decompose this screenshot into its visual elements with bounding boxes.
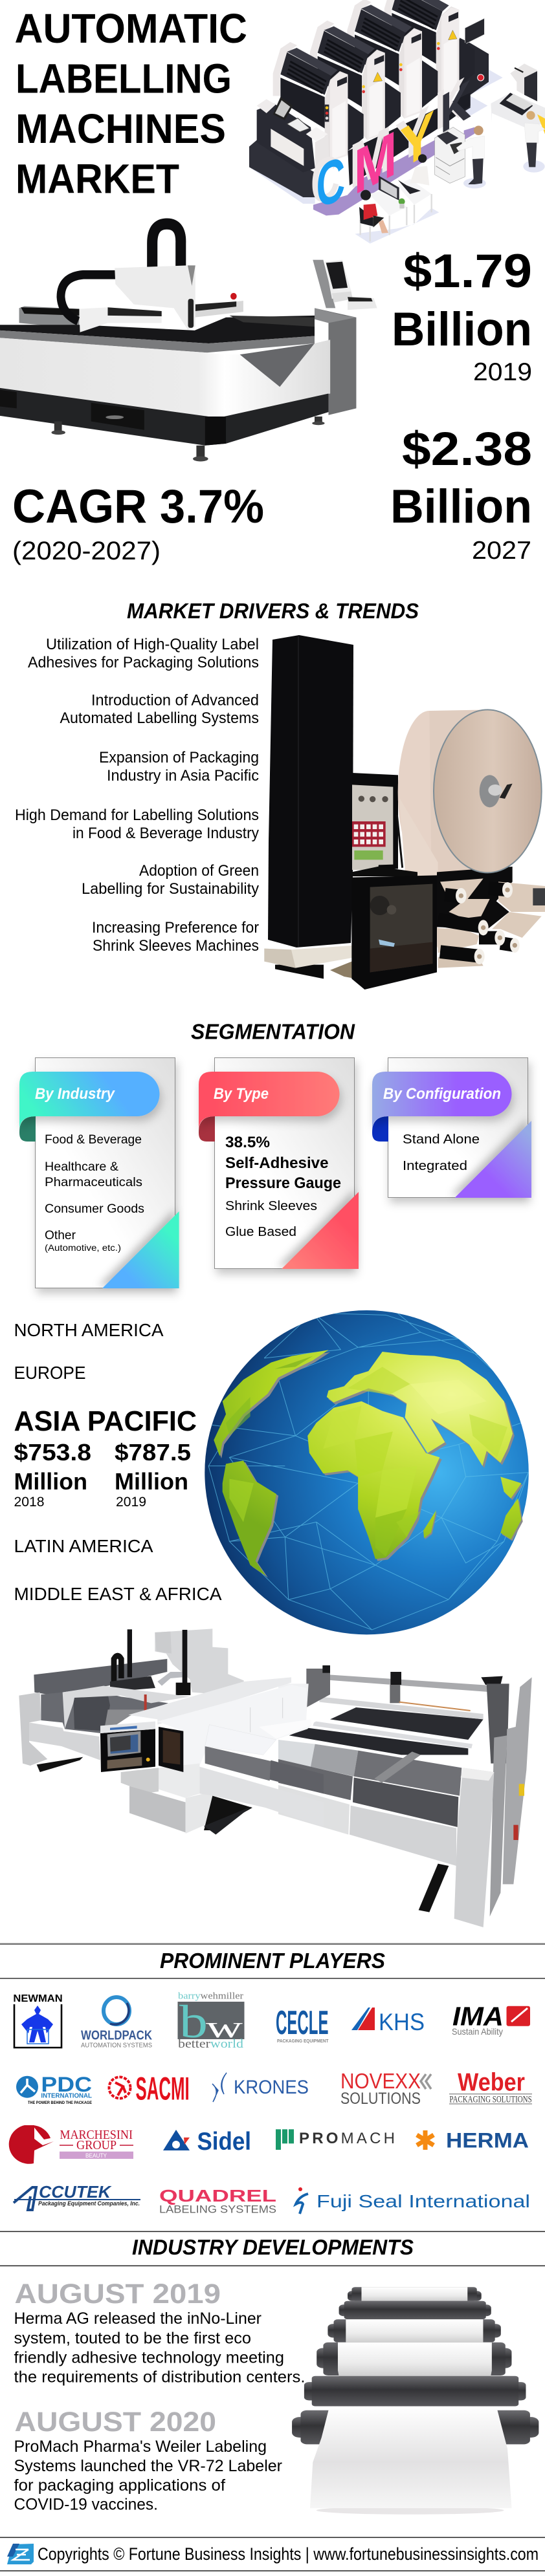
logo: PDC International: THE POWER BEHIND THE PACKAGE: [28, 2101, 93, 2105]
logo: Krones: [212, 2073, 309, 2102]
value: 2027 market size: 2027: [472, 537, 531, 565]
driver: automated systems: Automated Labelling Systems: [60, 709, 259, 727]
illustration: isometric CMYK printing press: C: [311, 140, 340, 219]
logo: ProMach: PROMACH: [299, 2130, 395, 2147]
development: August 2019: [14, 2278, 306, 2386]
value: 2019 market size: Billion: [392, 303, 532, 356]
panel: by configuration: Stand Alone: [403, 1132, 480, 1147]
illustration: isometric CMYK printing press: [249, 0, 545, 244]
title: AUTOMATIC: [14, 5, 247, 52]
panel: drivers list: [15, 636, 259, 955]
panel: by configuration: [372, 1058, 531, 1198]
logo: Sidel: [163, 2128, 251, 2156]
logo: KHS: [351, 2008, 425, 2035]
logo: Krones: KRONES: [234, 2077, 309, 2098]
heading: industry developments: [0, 2231, 545, 2266]
logo: Cecle: [276, 2004, 329, 2044]
illustration: isometric CMYK printing press: Y: [399, 97, 434, 184]
driver: label adhesives: Adhesives for Packaging Solutions: [28, 654, 259, 671]
logo: Newman: NEWMAN: [13, 1993, 63, 2004]
ribbon: by type: By Type: [214, 1085, 269, 1103]
logo: IMA: Sustain Ability: [452, 2026, 503, 2037]
driver: food and beverage demand: High Demand for Labelling Solutions: [15, 806, 259, 824]
value: 2019 market size: $1.79: [403, 245, 532, 298]
CAGR callout: [12, 481, 264, 565]
panel: by type: Self-Adhesive: [225, 1154, 329, 1172]
CAGR callout: (2020-2027): [12, 537, 161, 565]
value: 2019 market size: 2019: [473, 358, 532, 386]
driver: green labelling: [82, 862, 259, 898]
asia pacific values: $753.8: [14, 1439, 91, 1466]
logo: Novexx Solutions: SOLUTIONS: [340, 2090, 421, 2108]
panel: by configuration: Integrated: [403, 1159, 467, 1173]
logo: Worldpack: WORLDPACK: [81, 2028, 152, 2042]
driver: green labelling: Labelling for Sustainability: [82, 880, 259, 898]
value: 2027 market size: [390, 423, 532, 565]
illustration: globe: [205, 1306, 529, 1634]
panel: by industry: Consumer Goods: [45, 1202, 144, 1216]
asia pacific values: ASIA PACIFIC: [14, 1405, 197, 1437]
asia pacific values: 2018: [14, 1495, 44, 1510]
panel: by type: Glue Based: [225, 1225, 296, 1239]
illustration: paper rollers: [292, 2287, 539, 2515]
asia pacific values: [14, 1405, 197, 1510]
panel: by type: [199, 1058, 359, 1269]
development: August 2020: COVID-19 vaccines.: [14, 2495, 158, 2513]
logo: PDC International: INTERNATIONAL: [41, 2092, 93, 2099]
illustration: isometric CMYK printing press: K: [435, 65, 466, 143]
asia pacific values: Million: [115, 1468, 188, 1495]
panel: by type: Pressure Gauge: [225, 1174, 341, 1192]
logo: Accutek: CCUTEK: [39, 2182, 112, 2202]
logo: Barry-Wehmiller: b: [179, 1996, 208, 2048]
panel: by industry: [19, 1058, 179, 1288]
logo: Weber: [449, 2069, 532, 2105]
heading: industry developments: INDUSTRY DEVELOPMENTS: [132, 2235, 414, 2259]
logo: Barry-Wehmiller: [177, 1991, 245, 2051]
illustration: industrial labelling line: [19, 1629, 532, 1927]
asia pacific values: Million: [14, 1468, 87, 1495]
logo: Quadrel: [159, 2186, 276, 2216]
development: August 2019: friendly adhesive technology meeting: [14, 2349, 284, 2367]
heading: prominent players: PROMINENT PLAYERS: [160, 1949, 385, 1973]
driver: Asia Pacific packaging: Industry in Asia Pacific: [107, 767, 259, 785]
logo: ProMach: [276, 2129, 395, 2150]
driver: Asia Pacific packaging: [99, 749, 259, 785]
logo: Barry-Wehmiller: barrywehmiller: [178, 1991, 243, 2002]
panel: by industry: Other: [45, 1229, 76, 1242]
illustration: isometric CMYK printing press: M: [354, 116, 397, 208]
development: August 2019: Herma AG released the inNo-Liner: [14, 2310, 261, 2328]
asia pacific values: $787.5: [115, 1439, 191, 1466]
logo: Accutek: Packaging Equipment Companies, Inc.: [38, 2200, 140, 2207]
illustration: label applicator machine: [264, 635, 545, 990]
driver: food and beverage demand: in Food & Beverage Industry: [72, 825, 259, 842]
development: August 2019: system, touted to be the first eco: [14, 2330, 251, 2348]
title: LABELLING: [16, 56, 232, 102]
icon: Fortune Business Insights logo: [7, 2544, 34, 2564]
title: MACHINES: [16, 105, 226, 152]
ribbon: by type: [199, 1072, 339, 1131]
panel: by industry: Food & Beverage: [45, 1133, 142, 1147]
illustration: isometric CMYK printing press: C: [317, 144, 345, 222]
illustration: laser cutting machine: [0, 224, 377, 461]
logo: Marchesini Group: BEAUTY: [85, 2152, 107, 2159]
development: August 2020: Systems launched the VR-72 Labeler: [14, 2457, 282, 2475]
ribbon: by industry: [19, 1072, 159, 1131]
value: 2027 market size: Billion: [390, 481, 532, 533]
logo: PDC International: [16, 2073, 93, 2105]
logo: Fuji Seal International: [296, 2187, 530, 2214]
illustration: isometric CMYK printing press: M: [349, 111, 392, 203]
logo: Worldpack: AUTOMATION SYSTEMS: [81, 2041, 152, 2049]
footer: [0, 2537, 545, 2571]
CAGR callout: CAGR 3.7%: [12, 481, 264, 533]
text: CECLE: [276, 2004, 329, 2042]
driver: automated systems: [60, 692, 259, 727]
panel: regions: NORTH AMERICA: [14, 1320, 164, 1340]
logo: Sacmi: SACMI: [136, 2071, 190, 2107]
logo: IMA: IMA: [452, 2002, 504, 2031]
illustration: isometric CMYK printing press: Y: [395, 92, 430, 179]
panel: regions: EUROPE: [14, 1363, 85, 1383]
panel: regions: MIDDLE EAST & AFRICA: [14, 1584, 222, 1604]
logo: Quadrel: QUADREL: [159, 2186, 276, 2205]
panel: by industry: Healthcare &: [45, 1160, 118, 1174]
development: August 2020: for packaging applications of: [14, 2476, 225, 2495]
logo: Weber: Weber: [458, 2069, 525, 2097]
illustration: isometric CMYK printing press: K: [440, 67, 471, 146]
logo: Marchesini Group: MARCHESINI: [60, 2128, 133, 2142]
logo: IMA: [452, 2002, 530, 2037]
logo: PDC International: PDC: [41, 2073, 92, 2096]
logo: Herma: [417, 2129, 529, 2152]
logo: Marchesini Group: [9, 2125, 133, 2164]
logo: Fuji Seal International: Fuji Seal International: [317, 2191, 530, 2211]
logo: Worldpack: [81, 1997, 152, 2049]
driver: food and beverage demand: [15, 806, 259, 842]
panel: regions: [14, 1320, 222, 1604]
value: 2027 market size: $2.38: [402, 423, 532, 475]
title: [14, 5, 247, 202]
logo: Sacmi: [109, 2071, 190, 2107]
logo: Sidel: Sidel: [197, 2128, 251, 2156]
ribbon: by configuration: By Configuration: [383, 1085, 501, 1103]
logo: Accutek: [14, 2182, 140, 2210]
ribbon: by industry: By Industry: [35, 1085, 116, 1103]
panel: by industry: Pharmaceuticals: [45, 1176, 142, 1189]
driver: shrink sleeves: Increasing Preference for: [92, 919, 259, 936]
development: August 2020: AUGUST 2020: [14, 2407, 216, 2438]
logo: Marchesini Group: GROUP: [76, 2138, 117, 2152]
panel: by industry: (Automotive, etc.): [45, 1242, 121, 1253]
logo: Cecle: PACKAGING EQUIPMENT: [277, 2039, 329, 2044]
driver: shrink sleeves: [92, 919, 259, 955]
logo: Barry-Wehmiller: better world: [178, 2037, 244, 2051]
heading: segmentation: SEGMENTATION: [191, 1020, 355, 1044]
logo: Novexx Solutions: [340, 2069, 431, 2108]
development: August 2020: ProMach Pharma's Weiler Labeling: [14, 2438, 267, 2456]
panel: by type: Shrink Sleeves: [225, 1199, 317, 1213]
logo: Herma: HERMA: [446, 2129, 529, 2152]
heading: market drivers and trends: MARKET DRIVERS & TRENDS: [127, 599, 419, 623]
logo: Quadrel: LABELING SYSTEMS: [159, 2203, 276, 2216]
driver: Asia Pacific packaging: Expansion of Packaging: [99, 749, 259, 766]
ribbon: by configuration: [372, 1072, 511, 1131]
development: August 2020: [14, 2407, 282, 2513]
driver: green labelling: Adoption of Green: [139, 862, 259, 880]
panel: by type: 38.5%: [225, 1134, 270, 1151]
logo: Novexx Solutions: NOVEXX: [340, 2069, 421, 2093]
logo: Newman: [13, 1993, 63, 2048]
development: August 2019: AUGUST 2019: [14, 2278, 221, 2310]
logo: Barry-Wehmiller: w: [206, 2010, 243, 2044]
driver: label adhesives: [28, 636, 259, 671]
value: 2019 market size: [392, 245, 532, 386]
title: MARKET: [16, 155, 179, 202]
driver: shrink sleeves: Shrink Sleeves Machines: [93, 937, 259, 955]
development: August 2019: the requirements of distribution centers.: [14, 2368, 306, 2386]
logo: KHS: KHS: [379, 2009, 425, 2035]
driver: automated systems: Introduction of Advanced: [91, 692, 259, 709]
asia pacific values: 2019: [116, 1495, 146, 1510]
driver: label adhesives: Utilization of High-Quality Label: [46, 636, 259, 653]
panel: regions: LATIN AMERICA: [14, 1536, 153, 1556]
